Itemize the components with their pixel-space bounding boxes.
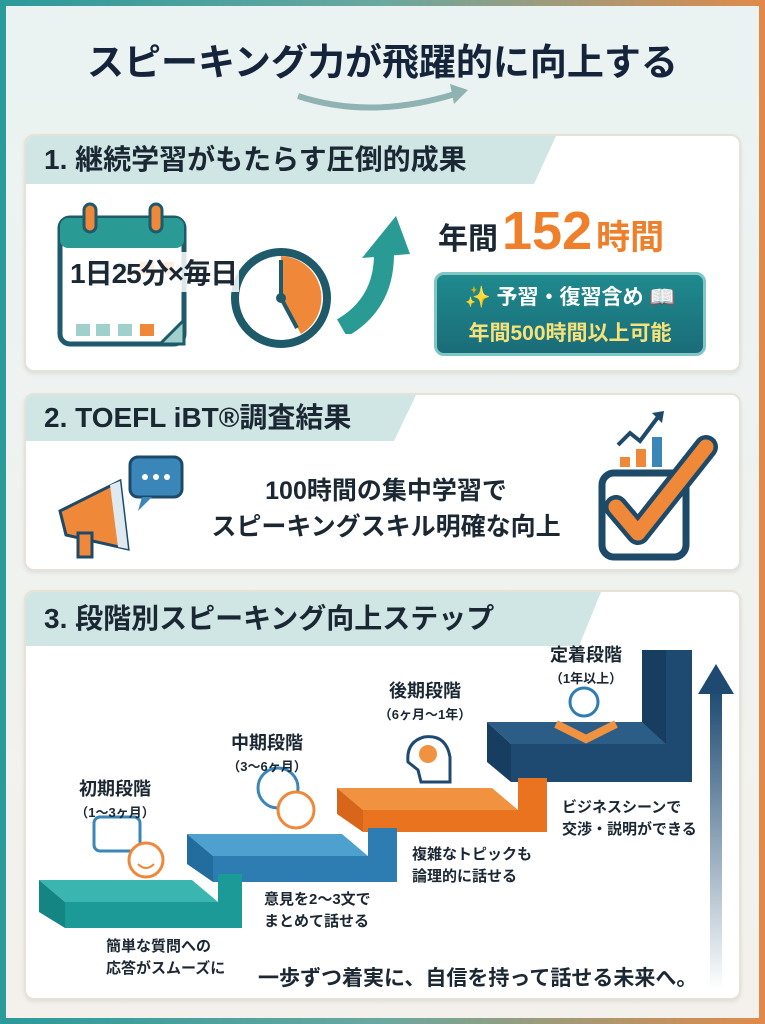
desc 4 bbox=[562, 799, 697, 838]
stat: 152 hours: 年間152時間 bbox=[438, 201, 664, 261]
stage 2 label bbox=[227, 733, 307, 774]
icon: megaphone bbox=[58, 456, 184, 558]
text: 1 day 25 min: 1日25分×毎日 bbox=[70, 258, 237, 289]
step 4 navy bbox=[642, 650, 692, 782]
desc 3: 論理的に話せる bbox=[412, 868, 517, 885]
desc 4: 交渉・説明ができる bbox=[562, 821, 697, 838]
badge: 500 hours: ✨ 予習・復習含め 📖 bbox=[465, 286, 675, 309]
stage 1 label bbox=[75, 779, 155, 820]
desc 2: まとめて話せる bbox=[264, 913, 369, 930]
text: 100 hours result bbox=[211, 477, 561, 541]
panel: 2 TOEFL bbox=[24, 393, 741, 571]
chart: staircase bbox=[39, 650, 734, 980]
step 1 teal bbox=[39, 880, 218, 902]
stage 3 label: （6ヶ月～1年） bbox=[379, 707, 471, 722]
desc 1: 簡単な質問への bbox=[106, 938, 211, 955]
panel: 1 continuous study bbox=[24, 134, 741, 372]
badge: 500 hours bbox=[434, 272, 706, 356]
desc 1: 応答がスムーズに bbox=[106, 960, 225, 977]
heading 3: 3. 段階別スピーキング向上ステップ bbox=[44, 603, 494, 634]
step 3 orange bbox=[337, 788, 518, 810]
icons simplified bbox=[94, 817, 140, 851]
icon: clock bbox=[231, 248, 331, 348]
desc 3 bbox=[412, 846, 532, 885]
icon: calendar bbox=[58, 202, 186, 346]
heading 1: 1. 継続学習がもたらす圧倒的成果 bbox=[44, 144, 467, 175]
heading 2: 2. TOEFL iBT®調査結果 bbox=[44, 402, 351, 433]
desc 2: 意見を2～3文で bbox=[264, 891, 371, 908]
stage 3 label bbox=[379, 681, 471, 722]
stage 4 label: 定着段階 bbox=[550, 645, 622, 665]
badge: 500 hours: 年間500時間以上可能 bbox=[468, 322, 672, 345]
heading 1 bbox=[26, 136, 556, 184]
title: スピーキング力が飛躍的に向上する bbox=[87, 42, 678, 83]
desc 4: ビジネスシーンで bbox=[562, 799, 681, 816]
arrow: up bbox=[337, 216, 410, 334]
desc 1 bbox=[106, 938, 225, 977]
text: 100 hours result: スピーキングスキル明確な向上 bbox=[211, 513, 561, 541]
heading 3 bbox=[26, 592, 601, 646]
text: 100 hours result: 100時間の集中学習で bbox=[265, 477, 507, 505]
stage 2 label: （3～6ヶ月） bbox=[227, 759, 307, 774]
icon: checkbox with chart bbox=[598, 411, 718, 560]
stage 2 label: 中期段階 bbox=[231, 733, 303, 753]
heading 2 bbox=[26, 395, 416, 441]
panel: 3 stages bbox=[24, 590, 741, 1000]
footer message: 一歩ずつ着実に、自信を持って話せる未来へ。 bbox=[258, 967, 697, 990]
stage 3 label: 後期段階 bbox=[389, 681, 461, 701]
stage 1 label: （1～3ヶ月） bbox=[75, 805, 155, 820]
step 2 blue bbox=[187, 834, 368, 856]
stage 4 label: （1年以上） bbox=[550, 671, 622, 686]
arrow: title swoosh bbox=[297, 84, 468, 110]
stage 4 label bbox=[550, 645, 622, 686]
desc 2 bbox=[264, 891, 371, 930]
stage 1 label: 初期段階 bbox=[79, 779, 151, 799]
desc 3: 複雑なトピックも bbox=[412, 846, 532, 863]
